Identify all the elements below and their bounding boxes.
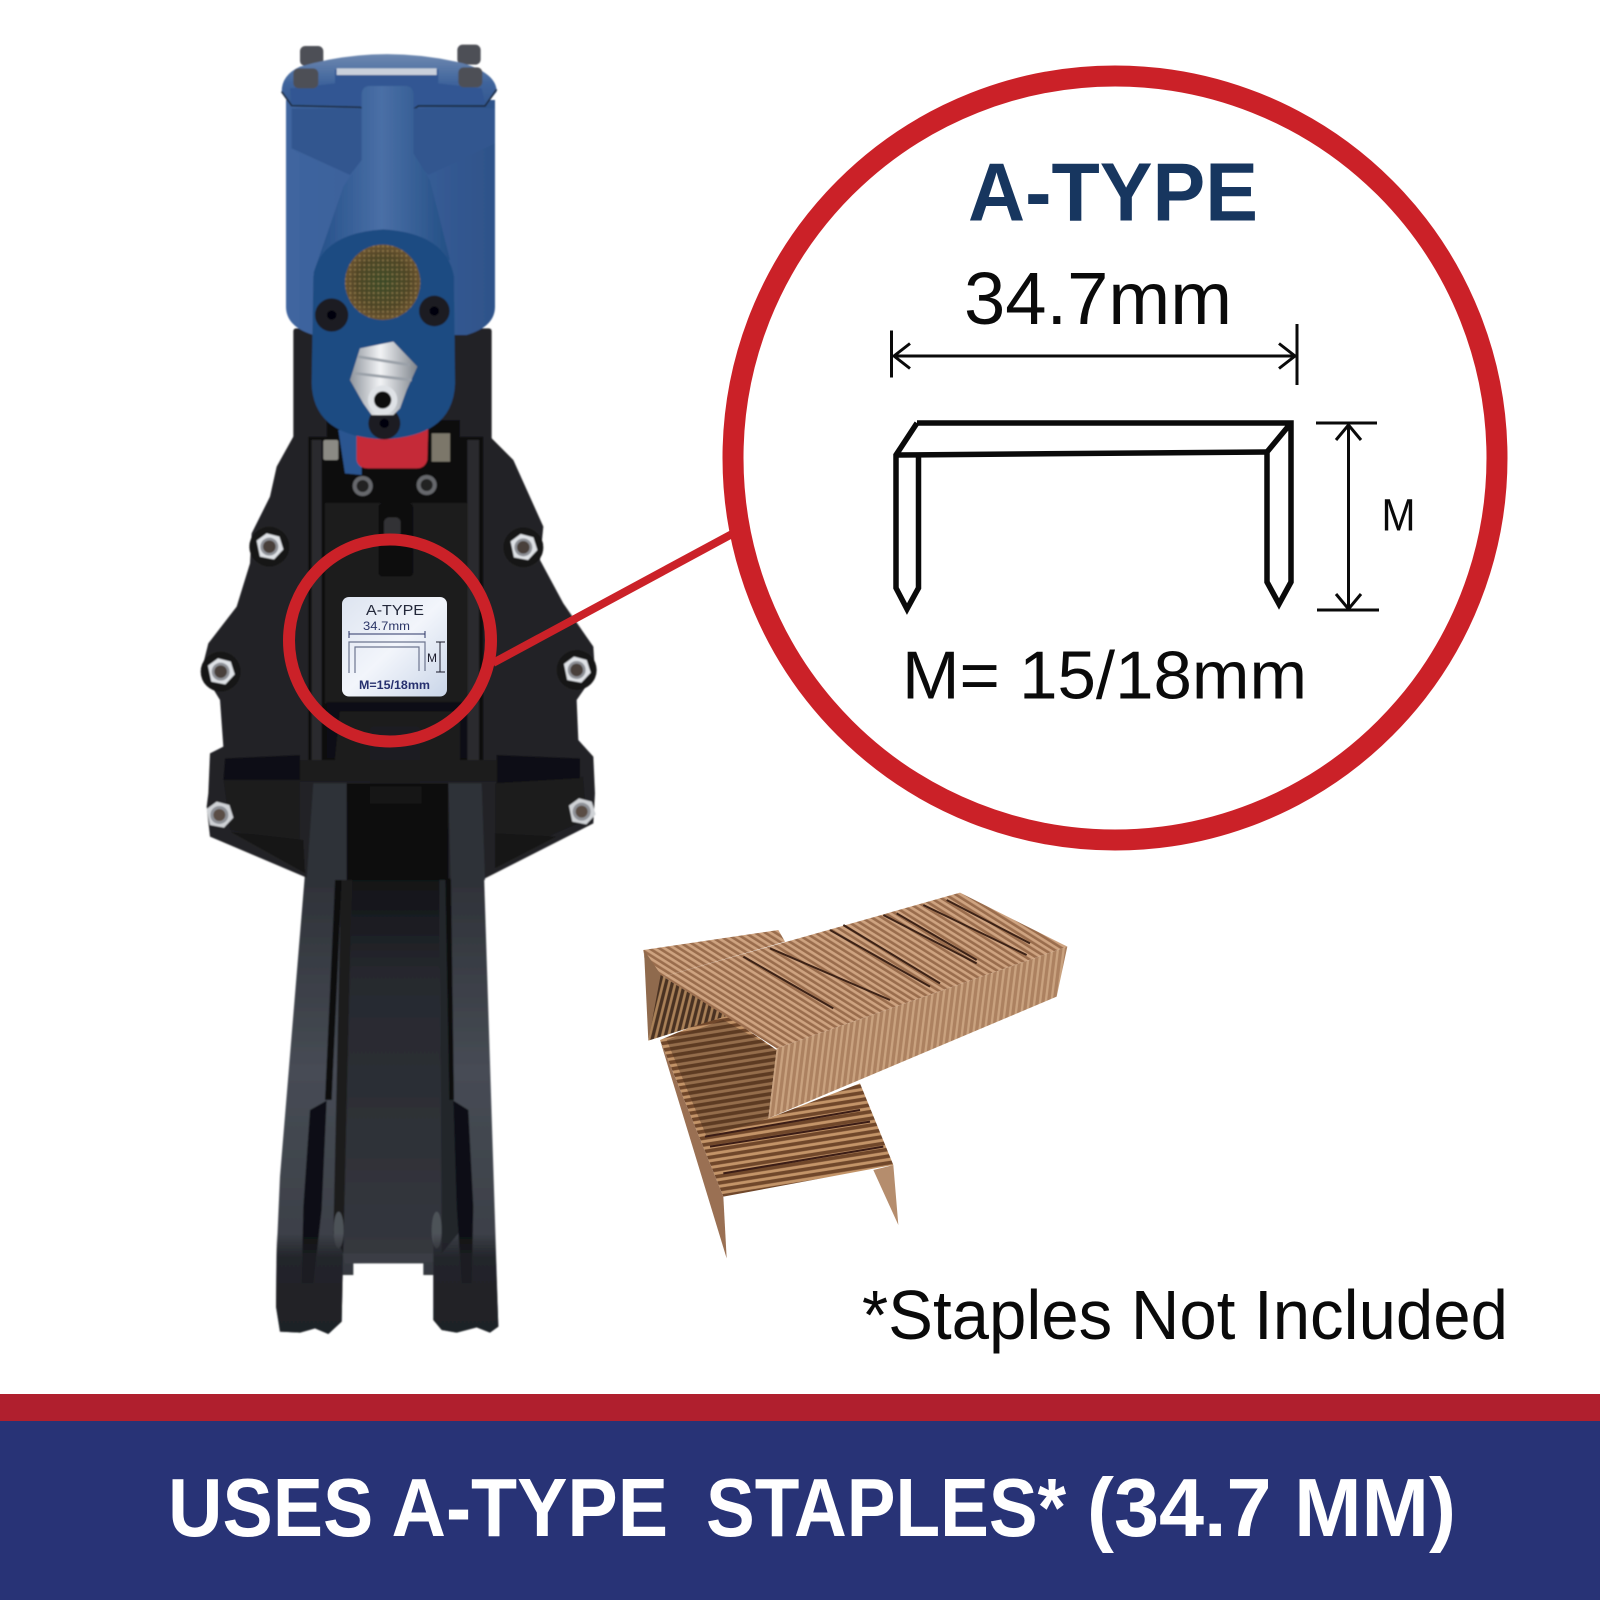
- screws: [315, 298, 348, 332]
- callout ring: [733, 76, 1497, 840]
- back staple edge: [643, 930, 785, 987]
- rear air block: [293, 328, 492, 468]
- banner headline: [168, 1461, 1456, 1554]
- lower staple strip: [660, 1013, 898, 1258]
- red stripe: [0, 1394, 1600, 1421]
- air fitting: [350, 342, 417, 415]
- callout title: A-TYPE: [968, 146, 1258, 238]
- machine size label: [342, 597, 447, 696]
- width value: 34.7mm: [964, 257, 1232, 340]
- housing bolts: [201, 475, 597, 828]
- upper staple strip front: [768, 947, 1067, 1118]
- staples disclaimer: *Staples Not Included: [862, 1276, 1508, 1354]
- copper staples photo: [643, 893, 1067, 1258]
- red trigger: [323, 423, 450, 475]
- callout: magnified staple size: [733, 76, 1497, 840]
- rear cap bolts: [300, 45, 481, 66]
- navy band: [0, 1421, 1600, 1600]
- black head housing: [202, 437, 595, 880]
- staple outline drawing: [896, 423, 1291, 609]
- height dimension arrow: [1316, 423, 1379, 610]
- machine size label: A-TYPE: [366, 602, 424, 619]
- upper staple strip top: [663, 893, 1067, 1048]
- machine size label: M=15/18mm: [359, 680, 430, 692]
- magazine rails: [276, 853, 498, 1334]
- small red focus ring: [289, 540, 491, 742]
- bottom banner: [0, 1394, 1600, 1600]
- machine size label: 34.7mm: [363, 621, 410, 633]
- banner headline: (34.7 MM): [1087, 1461, 1456, 1554]
- banner headline: USES A-TYPE: [168, 1461, 668, 1554]
- front cap bolts: [293, 67, 482, 88]
- callout connector line: [493, 534, 732, 663]
- banner headline: STAPLES*: [706, 1461, 1067, 1554]
- mesh filter: [345, 245, 420, 320]
- stapler tool photo: [201, 45, 597, 1334]
- size note: M= 15/18mm: [902, 638, 1307, 714]
- nozzle housing: [312, 229, 455, 439]
- width dimension arrow: [892, 324, 1297, 385]
- height label: M: [1382, 490, 1416, 540]
- machine size label: M: [427, 651, 437, 665]
- blue motor body: [282, 45, 497, 439]
